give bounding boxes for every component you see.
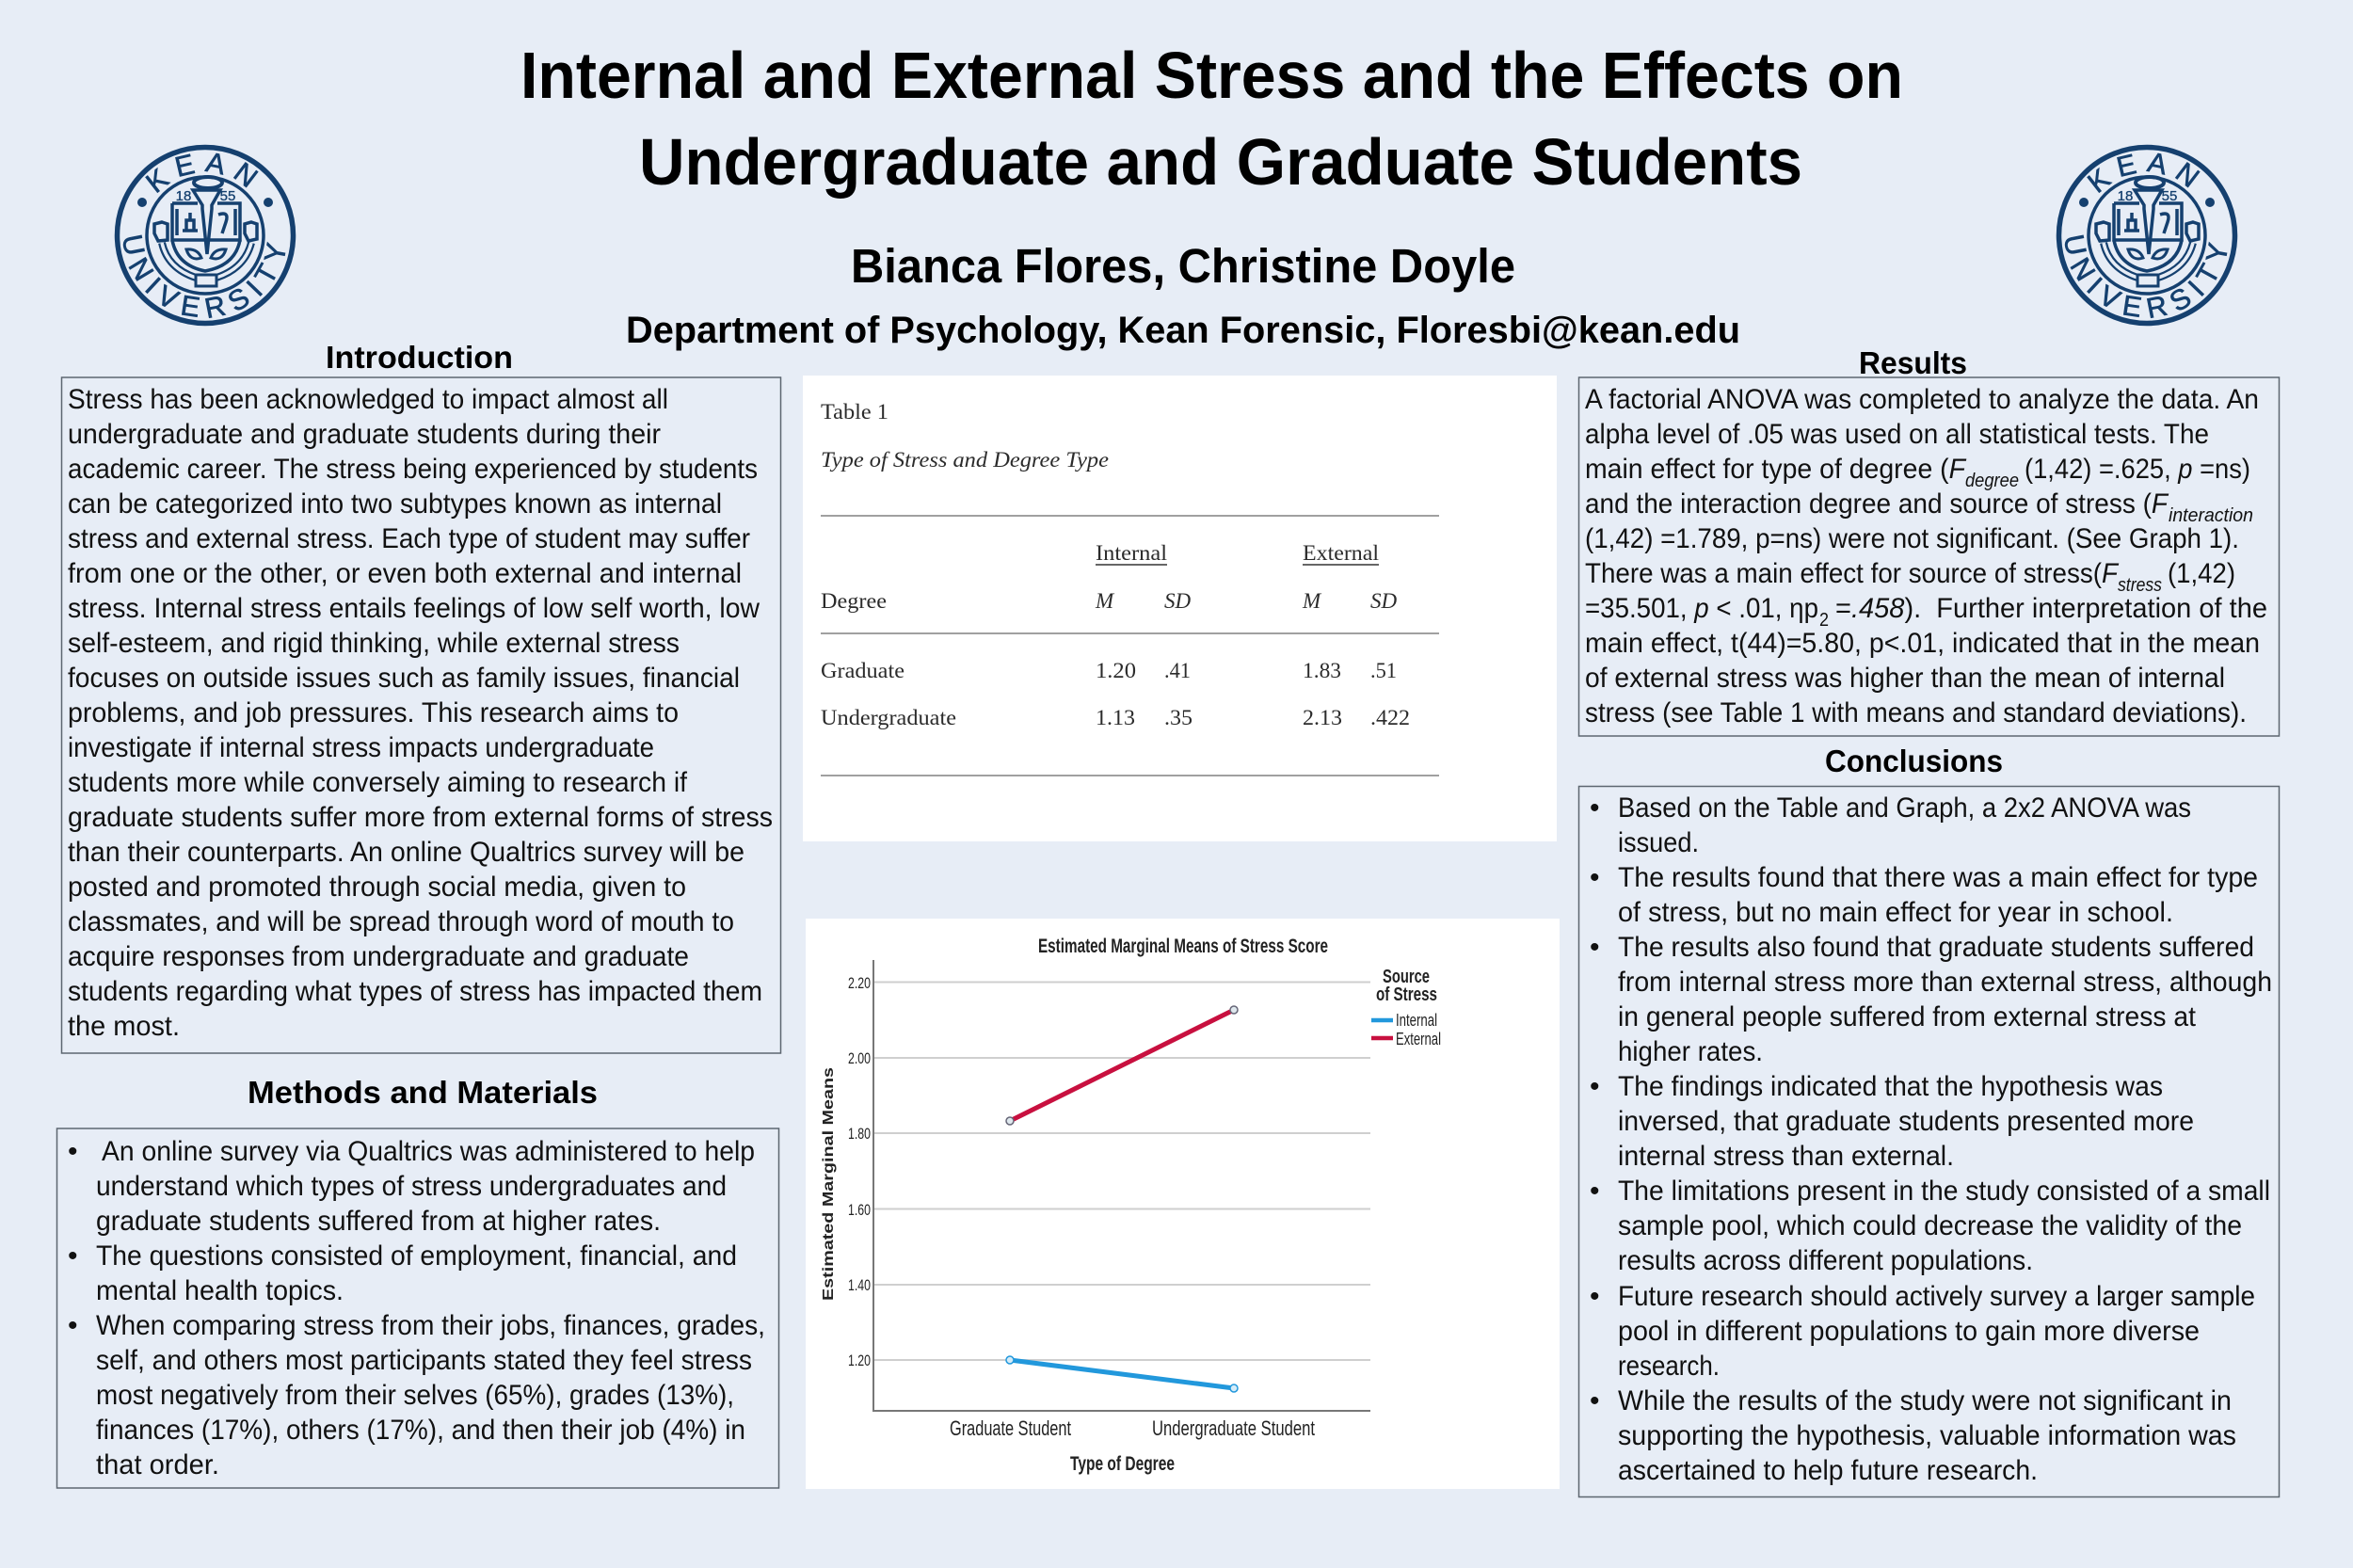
x axis category labels: Graduate Student (950, 1416, 1071, 1440)
text block: results: There was a main effect for source of stress(F (1585, 558, 2120, 589)
legend: of Stress (1376, 984, 1437, 1005)
text block: results: alpha level of .05 was used on all statistical tests. The (1585, 419, 2209, 450)
text block: conclusions list: inversed, that graduate students presented more (1618, 1106, 2194, 1137)
icon: Kean University seal left: UNIVERSITY (122, 235, 286, 318)
panel: table 1: Internal (1096, 541, 1167, 565)
text block: introduction: from one or the other, or even both external and internal (68, 558, 742, 589)
text block: conclusions list: While the results of the study were not significant in (1618, 1385, 2232, 1416)
heading: conclusions: Conclusions (1825, 744, 2003, 778)
text block: conclusions list: Future research should actively survey a larger sample (1618, 1281, 2255, 1312)
text block: conclusions list: The results also found that graduate students suffered (1618, 932, 2254, 963)
text block: conclusions list: ascertained to help future research. (1618, 1455, 2038, 1486)
text block: conclusions list: The findings indicated that the hypothesis was (1618, 1071, 2163, 1102)
text block: results: (1,42) =.625, p =ns) (2025, 454, 2250, 485)
panel: table 1: Type of Stress and Degree Type (821, 448, 1109, 472)
panel: table 1: M (1302, 589, 1322, 613)
text block: results: (1,42) =1.789, p=ns) were not significant. (See Graph 1). (1585, 523, 2239, 554)
title: Internal and External Stress and the Effects on (520, 39, 1903, 112)
heading: introduction: Introduction (326, 340, 513, 375)
text block: methods list: self, and others most participants stated they feel stress (96, 1345, 752, 1376)
text block: conclusions list: pool in different populations to gain more diverse (1618, 1316, 2200, 1347)
text block: methods list (68, 1136, 765, 1480)
icon: Kean University seal right: 18 (2118, 188, 2133, 204)
text block: conclusions list: in general people suffered from external stress at (1618, 1001, 2197, 1032)
text block: results: interaction (2169, 505, 2253, 526)
text block: conclusions list: supporting the hypothesis, valuable information was (1618, 1420, 2236, 1451)
text block: introduction: stress. Internal stress entails feelings of low self worth, low (68, 593, 760, 624)
text block: conclusions list: • (1590, 1281, 1600, 1312)
panel: table 1: 1.13 (1096, 706, 1135, 729)
text block: conclusions list: • (1590, 862, 1600, 893)
icon: Kean University seal left: 18 (176, 188, 191, 204)
icon: Kean University seal left (115, 145, 296, 326)
legend: External (1396, 1030, 1441, 1048)
panel: table 1: .422 (1370, 706, 1410, 729)
text block: introduction: the most. (68, 1011, 180, 1042)
y axis tick labels: 1.80 (848, 1125, 871, 1143)
y axis tick labels: 1.40 (848, 1276, 871, 1294)
text block: results: degree (1965, 471, 2019, 491)
panel: table 1: Table 1 (821, 400, 888, 424)
y axis tick labels (848, 974, 871, 1369)
text block: introduction: posted and promoted through social media, given to (68, 872, 686, 903)
text block: results: =35.501, p < .01, ηp (1585, 593, 1818, 624)
panel: table 1: .35 (1164, 706, 1193, 729)
x axis category labels (950, 1416, 1315, 1440)
panel: methods and materials (56, 1075, 779, 1488)
panel: table 1: M (1095, 589, 1115, 613)
text block: conclusions list: Based on the Table and Graph, a 2x2 ANOVA was (1618, 792, 2191, 824)
y axis tick labels: 1.20 (848, 1352, 871, 1369)
text block: methods list: • (68, 1136, 78, 1167)
chart title: Estimated Marginal Means of Stress Score (1038, 936, 1328, 957)
text block: conclusions list: results across different populations. (1618, 1245, 2033, 1276)
title: Undergraduate and Graduate Students (639, 125, 1802, 199)
text block: introduction: can be categorized into two subtypes known as internal (68, 488, 722, 520)
text block: conclusions list: higher rates. (1618, 1036, 1763, 1067)
text block: results: and the interaction degree and source of stress (F (1585, 488, 2169, 520)
text block: conclusions list: of stress, but no main effect for year in school. (1618, 897, 2173, 928)
text block: results: main effect, t(44)=5.80, p<.01, indicated that in the mean (1585, 628, 2260, 659)
text block: introduction: acquire responses from undergraduate and graduate (68, 941, 689, 972)
panel: line chart of estimated marginal means (806, 919, 1560, 1489)
text block: conclusions list: issued. (1618, 827, 1699, 858)
text block: results: stress (see Table 1 with means and standard deviations). (1585, 697, 2247, 728)
text block: methods list: • (68, 1240, 78, 1272)
text block: results: main effect for type of degree (F (1585, 454, 1967, 485)
text block: results: =.458). Further interpretation of the (1835, 593, 2267, 624)
y axis title: Estimated Marginal Means (821, 1067, 837, 1301)
text block: introduction: students regarding what types of stress has impacted them (68, 976, 762, 1007)
text block: methods list: An online survey via Qualtrics was administered to help (102, 1136, 755, 1167)
x axis category labels: Undergraduate Student (1152, 1416, 1315, 1440)
text block: conclusions list: • (1590, 1071, 1600, 1102)
text block: conclusions list: internal stress than external. (1618, 1141, 1954, 1172)
panel: table 1: 1.20 (1096, 659, 1136, 682)
panel: table 1: .51 (1370, 659, 1397, 682)
text block: results: 2 (1819, 610, 1829, 631)
heading: results: Results (1859, 345, 1967, 380)
y axis tick labels: 2.20 (848, 974, 871, 992)
text block: conclusions list: The results found that there was a main effect for type (1618, 862, 2258, 893)
text block: introduction: classmates, and will be spread through word of mouth to (68, 906, 734, 937)
text block: introduction: Stress has been acknowledged to impact almost all (68, 384, 668, 415)
x axis title: Type of Degree (1070, 1453, 1175, 1475)
text block: methods list: The questions consisted of employment, financial, and (96, 1240, 737, 1272)
legend (1371, 967, 1441, 1048)
panel: results (1579, 345, 2280, 736)
authors: Bianca Flores, Christine Doyle (851, 239, 1515, 293)
text block: results: stress (2118, 575, 2162, 596)
panel: table 1: SD (1164, 589, 1192, 613)
text block: introduction: graduate students suffer more from external forms of stress (68, 802, 773, 833)
text block: methods list: that order. (96, 1449, 219, 1480)
text block: conclusions list: research. (1618, 1351, 1720, 1382)
panel: introduction (62, 340, 781, 1053)
text block: conclusions list (1590, 792, 2272, 1486)
text block: introduction: problems, and job pressures. This research aims to (68, 697, 679, 728)
text block: introduction: focuses on outside issues such as family issues, financial (68, 663, 740, 694)
text block: introduction: undergraduate and graduate students during their (68, 419, 661, 450)
text block: methods list: mental health topics. (96, 1275, 344, 1306)
y axis tick labels: 2.00 (848, 1049, 871, 1067)
icon: Kean University seal left: 55 (220, 188, 235, 204)
legend: Internal (1396, 1011, 1437, 1030)
series: internal (1006, 1356, 1238, 1392)
text block: conclusions list: • (1590, 792, 1600, 824)
text block: introduction: students more while conversely aiming to research if (68, 767, 688, 798)
icon: Kean University seal right (2056, 145, 2238, 326)
text block: methods list: • (68, 1310, 78, 1341)
icon: Kean University seal left: KEAN (145, 152, 259, 194)
gridlines and axes (873, 960, 1370, 1411)
panel: table 1: Degree (821, 589, 887, 613)
heading: methods and materials: Methods and Materials (248, 1075, 598, 1110)
text block: methods list: finances (17%), others (17%), and then their job (4%) in (96, 1415, 745, 1446)
text block: introduction: academic career. The stress being experienced by students (68, 454, 758, 485)
text block: results: A factorial ANOVA was completed to analyze the data. An (1585, 384, 2259, 415)
icon: Kean University seal right: UNIVERSITY (2065, 235, 2227, 318)
icon: Kean University seal right: 55 (2162, 188, 2177, 204)
text block: introduction: stress and external stress. Each type of student may suffer (68, 523, 750, 554)
panel: conclusions (1579, 744, 2280, 1496)
panel: table 1: Undergraduate (821, 706, 956, 729)
text block: methods list: When comparing stress from their jobs, finances, grades, (96, 1310, 765, 1341)
text block: conclusions list: from internal stress more than external stress, although (1618, 967, 2272, 998)
y axis tick labels: 1.60 (848, 1201, 871, 1219)
text block: results: of external stress was higher than the mean of internal (1585, 663, 2225, 694)
text block: conclusions list: • (1590, 1176, 1600, 1207)
icon: Kean University seal right: KEAN (2087, 152, 2201, 194)
panel: table 1: SD (1370, 589, 1397, 613)
panel: table 1: Graduate (821, 659, 904, 682)
text block: introduction (68, 384, 773, 1042)
panel: table 1: .41 (1164, 659, 1191, 682)
series: external (1006, 1006, 1238, 1125)
text block: introduction: self-esteem, and rigid thinking, while external stress (68, 628, 680, 659)
text block: methods list: most negatively from their selves (65%), grades (13%), (96, 1380, 734, 1411)
panel: table 1: 2.13 (1303, 706, 1342, 729)
panel: table 1: External (1303, 541, 1379, 565)
panel: table 1: 1.83 (1303, 659, 1341, 682)
text block: conclusions list: • (1590, 1385, 1600, 1416)
text block: methods list: understand which types of stress undergraduates and (96, 1171, 727, 1202)
panel: table 1 (803, 376, 1557, 841)
text block: results (1585, 384, 2267, 728)
text block: conclusions list: • (1590, 932, 1600, 963)
department line: Department of Psychology, Kean Forensic, Floresbi@kean.edu (626, 310, 1740, 351)
legend: Source (1383, 967, 1430, 987)
text block: conclusions list: The limitations present in the study consisted of a small (1618, 1176, 2270, 1207)
text block: conclusions list: sample pool, which could decrease the validity of the (1618, 1210, 2242, 1241)
title (520, 39, 1903, 199)
text block: results: (1,42) (2168, 558, 2235, 589)
text block: introduction: investigate if internal stress impacts undergraduate (68, 732, 654, 763)
text block: methods list: graduate students suffered from at higher rates. (96, 1206, 661, 1237)
text block: introduction: than their counterparts. An online Qualtrics survey will be (68, 837, 744, 868)
